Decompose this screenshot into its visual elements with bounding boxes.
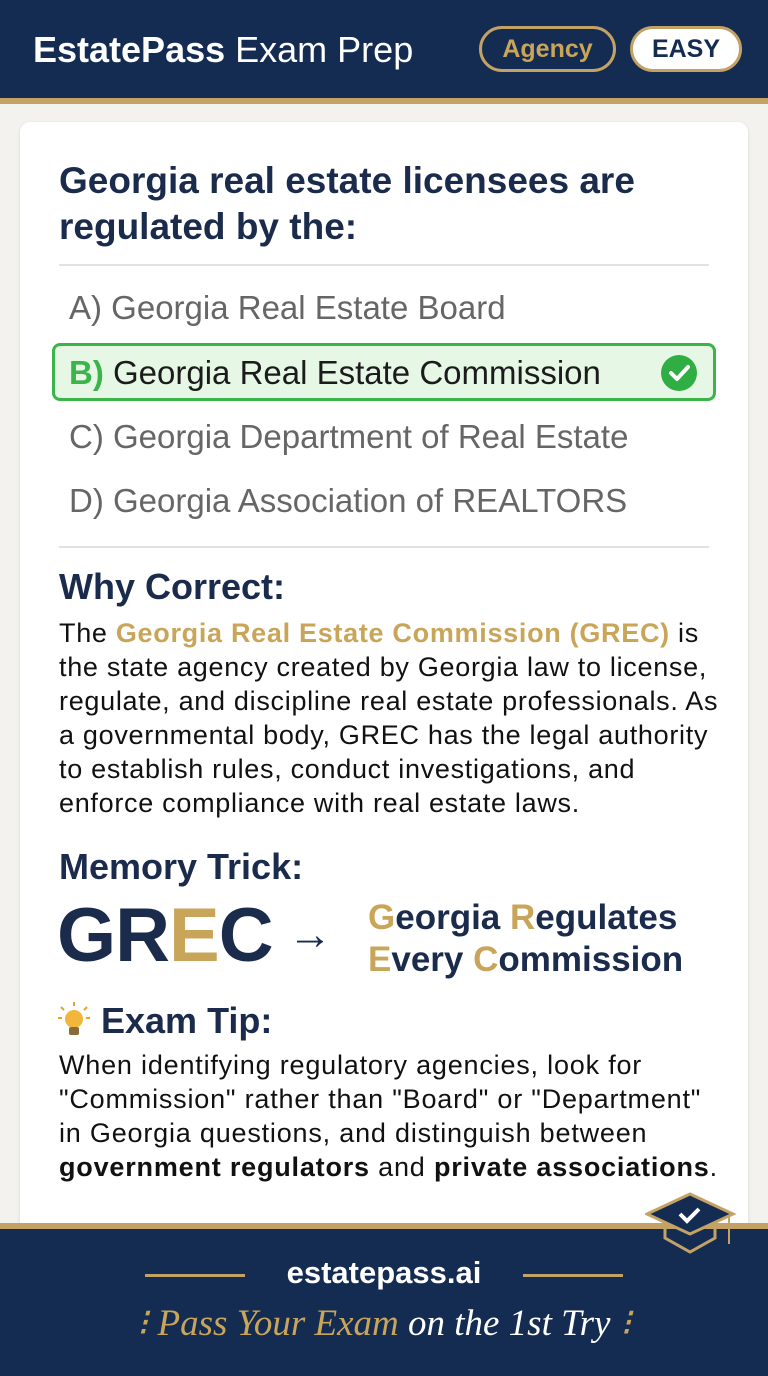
badge: Agency: Agency	[502, 35, 593, 63]
question heading	[59, 160, 635, 247]
heading: Memory Trick: Memory Trick:	[59, 846, 303, 887]
explanation text: regulate, and discipline real estate professionals. As	[59, 686, 718, 716]
badge: EASY	[630, 26, 742, 72]
heading: Exam Tip with bulb icon: Exam Tip:	[101, 1000, 272, 1041]
explanation text: to establish rules, conduct investigations, and	[59, 754, 635, 784]
tip text: government regulators and private associations.	[59, 1152, 718, 1182]
option B correct: B) Georgia Real Estate Commission	[69, 354, 601, 391]
tip text: When identifying regulatory agencies, look for	[59, 1050, 642, 1080]
footer bar	[0, 1223, 768, 1376]
option C: C) Georgia Department of Real Estate	[69, 418, 628, 455]
slogan: ⁝ Pass Your Exam on the 1st Try ⁝	[136, 1303, 632, 1344]
badge: EASY: EASY	[652, 35, 720, 63]
option B correct	[52, 343, 716, 401]
arrow: →	[288, 910, 332, 959]
heading: Why Correct: Why Correct:	[59, 566, 285, 607]
explanation text	[59, 618, 718, 818]
mnemonic expansion: Georgia Regulates	[368, 898, 677, 937]
question heading: Georgia real estate licensees are	[59, 160, 635, 201]
option A: A) Georgia Real Estate Board	[69, 289, 506, 326]
question card	[20, 122, 748, 1232]
explanation text: the state agency created by Georgia law to license,	[59, 652, 707, 682]
mnemonic expansion: Every Commission	[368, 940, 683, 979]
option D: D) Georgia Association of REALTORS	[69, 482, 627, 519]
tip text	[59, 1050, 718, 1182]
question heading: regulated by the:	[59, 206, 357, 247]
explanation text: The Georgia Real Estate Commission (GREC) is	[59, 618, 699, 648]
mnemonic expansion	[368, 898, 683, 979]
mnemonic GREC: GREC	[57, 893, 273, 978]
icon: check circle	[661, 355, 697, 391]
header bar	[0, 0, 768, 104]
badge: Agency	[479, 26, 616, 72]
explanation text: a governmental body, GREC has the legal authority	[59, 720, 708, 750]
footer url: estatepass.ai	[287, 1255, 481, 1290]
brand title: EstatePass Exam Prep	[33, 29, 413, 70]
icon: graduation cap	[645, 1192, 736, 1254]
explanation text: enforce compliance with real estate laws.	[59, 788, 580, 818]
tip text: "Commission" rather than "Board" or "Department"	[59, 1084, 701, 1114]
tip text: in Georgia questions, and distinguish between	[59, 1118, 647, 1148]
